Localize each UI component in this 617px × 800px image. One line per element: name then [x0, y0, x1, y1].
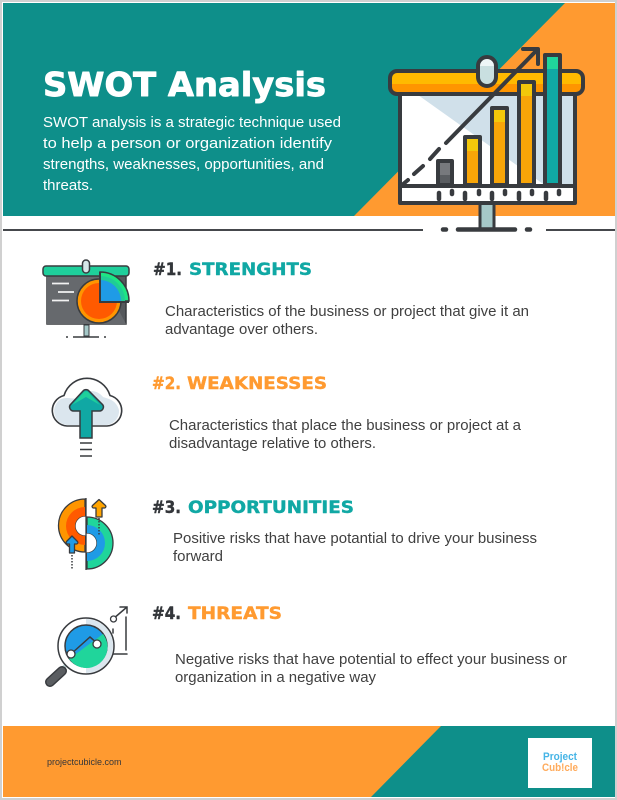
heading: opportunities: OPPORTUNITIES [188, 498, 354, 517]
footer logo: Project [543, 751, 577, 763]
heading: strengths: #1. [153, 260, 182, 279]
text: strengths [165, 304, 529, 338]
intro text: SWOT analysis is a strategic technique used [43, 114, 341, 131]
heading: threats [152, 604, 282, 623]
footer logo: Cub!cle [542, 762, 578, 774]
text: opportunities [173, 531, 537, 565]
heading: weaknesses: WEAKNESSES [187, 374, 327, 393]
text: weaknesses: Characteristics that place the business or project at a [169, 418, 522, 434]
heading: threats: THREATS [188, 604, 282, 623]
icon: weaknesses cloud upload [52, 378, 122, 456]
icon: strengths presentation with pie chart [43, 260, 129, 337]
heading: strengths: STRENGHTS [189, 260, 312, 279]
intro text: strengths, weaknesses, opportunities, and [43, 156, 324, 173]
text: threats: Negative risks that have potential to effect your business or [175, 652, 567, 668]
footer logo [528, 738, 592, 788]
text: opportunities: forward [173, 549, 223, 565]
footer band [3, 726, 615, 797]
title: SWOT Analysis [43, 65, 326, 104]
icon: opportunities dollar chart [58, 498, 113, 570]
icon: presentation board with rising bar chart [390, 49, 583, 230]
divider [3, 229, 615, 231]
text: weaknesses: disadvantage relative to others. [169, 436, 376, 452]
text: strengths: advantage over others. [165, 322, 318, 338]
heading: threats: #4. [152, 604, 181, 623]
text: threats [175, 652, 567, 686]
intro text: threats. [43, 177, 93, 194]
footer website text: projectcubicle.com [47, 757, 122, 767]
text: strengths: Characteristics of the business or project that give it an [165, 304, 529, 320]
icon: threats magnifying glass [50, 607, 127, 682]
heading: weaknesses: #2. [152, 374, 181, 393]
text: threats: organization in a negative way [175, 670, 377, 686]
text: weaknesses [169, 418, 522, 452]
heading: opportunities: #3. [152, 498, 181, 517]
header banner [3, 3, 615, 216]
text: opportunities: Positive risks that have potantial to drive your business [173, 531, 537, 547]
intro text [43, 114, 341, 194]
intro text: to help a person or organization identify [43, 135, 333, 152]
